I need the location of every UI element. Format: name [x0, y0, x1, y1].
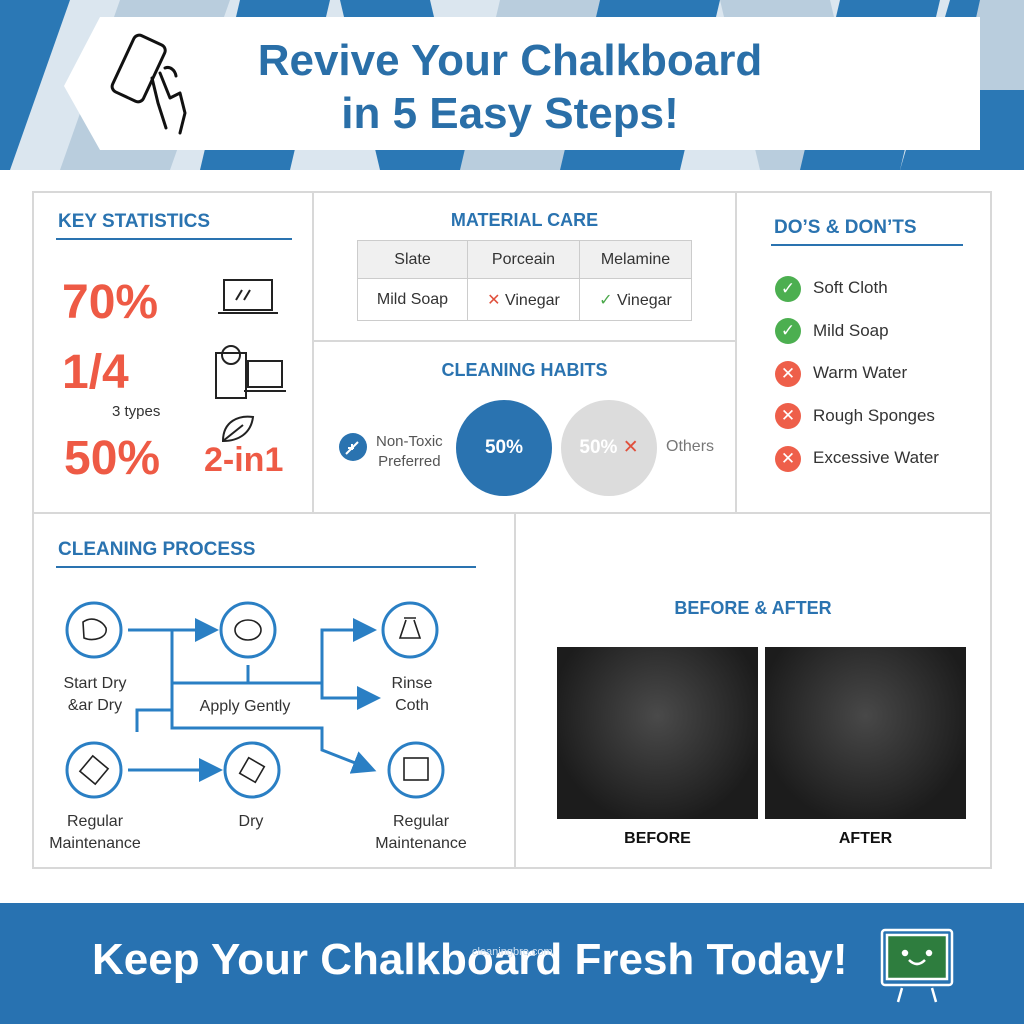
icon: leaf circle	[339, 433, 367, 461]
icon: hand with eraser	[110, 34, 186, 134]
pie: 50%: 50%	[485, 437, 523, 458]
footer banner: Keep Your Chalkboard Fresh Today!	[92, 935, 847, 984]
title text: Revive Your Chalkboard	[258, 36, 762, 85]
panel: key statistics	[32, 191, 314, 514]
pie: others: 50% ✕	[579, 437, 639, 458]
flow diagram: Dry	[239, 813, 263, 830]
pie: 50%	[456, 400, 552, 496]
title banner	[64, 17, 980, 150]
title text	[258, 36, 762, 138]
panel: cleaning habits: CLEANING HABITS	[442, 360, 608, 380]
header background pattern	[0, 0, 1024, 170]
flow diagram: Apply Gently	[200, 698, 290, 715]
image: before chalkboard	[557, 647, 758, 819]
panel: before & after: AFTER	[839, 830, 892, 847]
table: Slate	[394, 250, 431, 268]
flow diagram: Coth	[395, 697, 429, 714]
panel: do's and don'ts: Rough Sponges	[813, 406, 935, 424]
panel: do's and don'ts: DO’S & DON’TS	[774, 217, 917, 238]
panel: key statistics: KEY STATISTICS	[58, 211, 210, 232]
panel: cleaning habits: Others	[666, 438, 714, 455]
flow diagram: Start Dry	[63, 675, 127, 692]
panel: do's and don'ts: Mild Soap	[813, 320, 889, 340]
table: ✓ Vinegar	[599, 292, 672, 308]
panel: do's and don'ts: ✓	[781, 321, 795, 340]
panel: material care	[312, 191, 737, 342]
pie: others	[561, 400, 657, 496]
panel: do's and don'ts: Warm Water	[813, 363, 907, 382]
table: Mild Soap	[377, 290, 448, 308]
panel: cleaning habits: Non-Toxic	[376, 433, 443, 450]
flow diagram: Regular	[67, 813, 124, 830]
table: ✕ Vinegar	[487, 292, 560, 308]
panel: do's and don'ts: ✕	[781, 449, 795, 468]
icon: smiling chalkboard	[880, 928, 954, 1002]
title text: in 5 Easy Steps!	[341, 89, 679, 138]
panel: cleaning process	[32, 512, 516, 869]
flow diagram: Regular	[393, 813, 450, 830]
panel: key statistics: 70%	[62, 276, 158, 329]
panel: before & after: BEFORE & AFTER	[674, 598, 832, 618]
flow diagram: &ar Dry	[68, 697, 122, 714]
table	[357, 240, 692, 321]
panel: key statistics: 2-in1	[204, 441, 283, 479]
panel: material care: MATERIAL CARE	[451, 210, 598, 230]
panel: do's and don'ts	[735, 191, 992, 514]
panel: before & after: BEFORE	[624, 830, 691, 847]
icon: leaf	[222, 416, 254, 442]
panel: cleaning habits: Preferred	[378, 453, 441, 470]
panel: do's and don'ts: Excessive Water	[813, 448, 939, 467]
panel: do's and don'ts: ✕	[781, 406, 795, 425]
flow diagram: Maintenance	[375, 835, 467, 852]
footer banner	[0, 903, 1024, 1024]
panel: key statistics: 3 types	[112, 403, 160, 420]
panel: do's and don'ts: ✓	[781, 279, 795, 298]
panel: before & after	[514, 512, 992, 869]
panel: do's and don'ts: ✕	[781, 364, 795, 383]
flow diagram	[49, 602, 467, 852]
panel: cleaning habits	[312, 340, 737, 514]
icon: laptop	[218, 279, 278, 314]
table: Porceain	[492, 250, 555, 268]
panel: key statistics: 1/4	[62, 346, 129, 399]
flow diagram: Rinse	[392, 675, 433, 692]
flow diagram: Maintenance	[49, 835, 141, 852]
panel: do's and don'ts: Soft Cloth	[813, 278, 888, 297]
table: Melamine	[601, 250, 670, 268]
panel: cleaning process: CLEANING PROCESS	[58, 539, 255, 560]
panel: key statistics: 50%	[64, 432, 160, 485]
icon: question screen	[215, 345, 286, 399]
image: after chalkboard	[765, 647, 966, 819]
footer banner: cleaningbro.com	[472, 946, 553, 958]
